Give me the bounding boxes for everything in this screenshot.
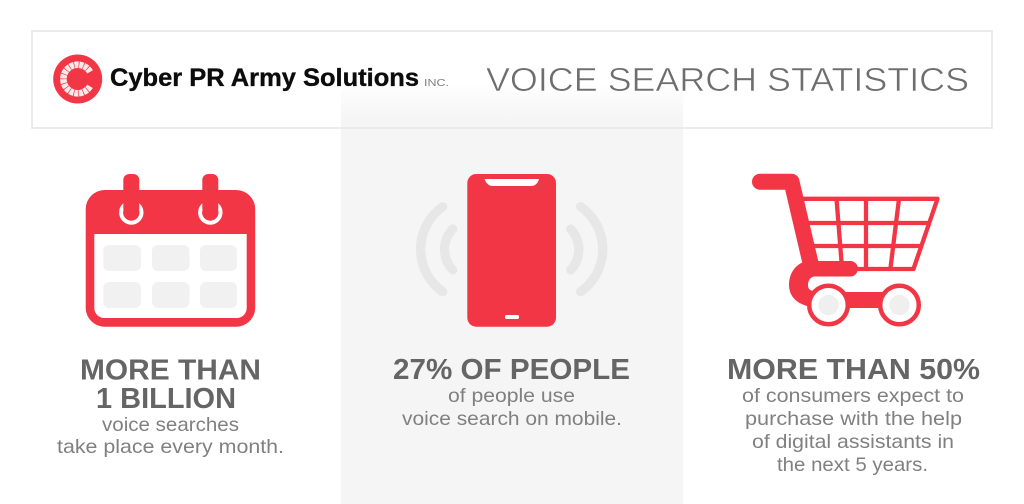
icon: logo circle: [53, 54, 102, 104]
text: phone statistic: 27% OF PEOPLE: [393, 354, 630, 386]
text: cart statistic: MORE THAN 50%: [727, 354, 980, 386]
header box: [32, 31, 992, 128]
text: cart statistic: the next 5 years.: [777, 454, 928, 476]
text: phone statistic: [393, 354, 630, 430]
panel: centre column background: [341, 84, 683, 504]
text: phone statistic: voice search on mobile.: [402, 408, 622, 430]
text: calendar statistic: MORE THAN: [80, 354, 261, 386]
text: cart statistic: of consumers expect to: [742, 385, 964, 407]
text: phone statistic: of people use: [448, 385, 575, 407]
icon: phone with sound waves: [421, 174, 603, 327]
logo wordmark: Cyber PR Army Solutions: [110, 64, 419, 92]
text: calendar statistic: 1 BILLION: [96, 383, 236, 415]
text: calendar statistic: [57, 354, 284, 458]
text: cart statistic: of digital assistants in: [752, 431, 954, 453]
text: calendar statistic: take place every month.: [57, 436, 284, 458]
icon: shopping cart: [760, 182, 938, 324]
text: cart statistic: [727, 354, 980, 476]
title: VOICE SEARCH STATISTICS: [486, 62, 969, 99]
icon: calendar: [86, 174, 255, 327]
text: cart statistic: purchase with the help: [745, 408, 962, 430]
text: calendar statistic: voice searches: [102, 414, 239, 436]
logo suffix: INC.: [424, 77, 449, 89]
logo: [53, 54, 449, 104]
